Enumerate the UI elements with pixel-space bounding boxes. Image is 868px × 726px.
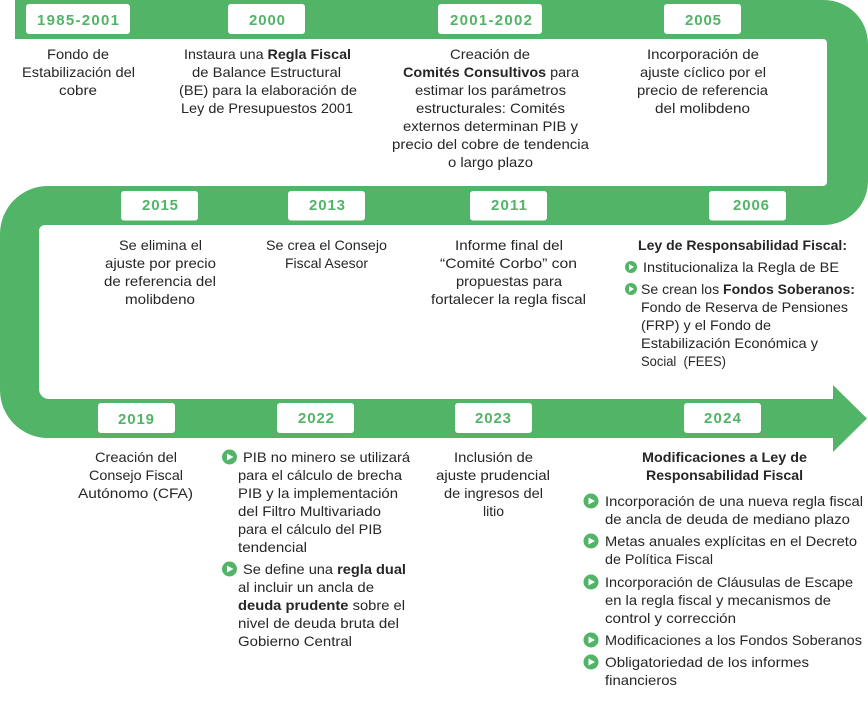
event 2022: PIB y la implementación: [238, 485, 398, 501]
event 2022: para el cálculo del PIB: [238, 521, 382, 537]
event 1985-2001: Estabilización del: [22, 64, 135, 80]
event 2006: Social (FEES): [641, 353, 726, 369]
event 2006: Institucionaliza la Regla de BE: [643, 259, 839, 275]
event 2015: 2015: [142, 197, 178, 214]
event 2024: Modificaciones a los Fondos Soberanos: [605, 632, 862, 648]
event 2023: litio: [483, 503, 504, 519]
event 2022: [222, 403, 410, 649]
event 2001-2002: Creación de: [450, 46, 530, 62]
event 2015: Se elimina el: [119, 237, 202, 253]
event 2005: del molibdeno: [655, 100, 750, 116]
event 2001-2002: estimar los parámetros: [415, 82, 566, 98]
event 2006: (FRP) y el Fondo de: [641, 317, 771, 333]
event 2013: Se crea el Consejo: [266, 237, 387, 253]
event 2001-2002: externos determinan PIB y: [403, 118, 578, 134]
event 2023: [436, 403, 550, 519]
event 2015: [104, 191, 216, 307]
event 2022: Gobierno Central: [238, 633, 352, 649]
event 2005: precio de referencia: [637, 82, 768, 98]
event 1985-2001: Fondo de: [47, 46, 109, 62]
event 2001-2002: 2001-2002: [450, 12, 532, 29]
event 2001-2002: estructurales: Comités: [416, 100, 565, 116]
event 2024: Incorporación de una nueva regla fiscal: [605, 493, 863, 509]
event 2023: Inclusión de: [454, 449, 533, 465]
event 2024: financieros: [605, 672, 677, 688]
event 2001-2002: o largo plazo: [448, 154, 533, 170]
event 2024: 2024: [704, 410, 742, 427]
event 2024: Responsabilidad Fiscal: [646, 467, 803, 483]
event 2019: [78, 403, 193, 501]
event 2024: de Política Fiscal: [605, 551, 713, 567]
event 2024: de ancla de deuda de mediano plazo: [605, 511, 850, 527]
event 2024: Modificaciones a Ley de: [642, 449, 807, 465]
event 2022: para el cálculo de brecha: [238, 467, 402, 483]
event 2024: [584, 403, 863, 688]
event 2000: [179, 4, 357, 116]
event 1985-2001: 1985-2001: [37, 12, 119, 29]
event 2019: Creación del: [95, 449, 177, 465]
event 2001-2002: precio del cobre de tendencia: [392, 136, 589, 152]
event 1985-2001: [22, 4, 135, 98]
event 2022: Se define una regla dual: [243, 561, 406, 577]
event 2000: de Balance Estructural: [192, 64, 341, 80]
event 2011: [431, 191, 586, 307]
event 2022: tendencial: [238, 539, 307, 555]
event 2000: Instaura una Regla Fiscal: [184, 46, 351, 62]
event 1985-2001: cobre: [59, 82, 97, 98]
event 2023: 2023: [475, 410, 511, 427]
event 2006: Se crean los Fondos Soberanos:: [641, 281, 855, 297]
event 2013: 2013: [309, 197, 345, 214]
event 2006: Fondo de Reserva de Pensiones: [641, 299, 848, 315]
event 2024: en la regla fiscal y mecanismos de: [605, 592, 831, 608]
event 2013: [266, 191, 387, 271]
event 2006: 2006: [733, 197, 769, 214]
event 2011: propuestas para: [456, 273, 562, 289]
event 2022: nivel de deuda bruta del: [238, 615, 399, 631]
event 2024: Obligatoriedad de los informes: [605, 654, 809, 670]
event 2023: ajuste prudencial: [436, 467, 550, 483]
event 2011: 2011: [491, 197, 527, 214]
event 2019: Autónomo (CFA): [78, 485, 193, 501]
event 2005: [637, 4, 768, 116]
event 2022: PIB no minero se utilizará: [243, 449, 410, 465]
event 2022: deuda prudente sobre el: [238, 597, 405, 613]
event 2015: ajuste por precio: [105, 255, 216, 271]
event 2005: Incorporación de: [647, 46, 759, 62]
event 2024: Incorporación de Cláusulas de Escape: [605, 574, 853, 590]
event 2022: del Filtro Multivariado: [238, 503, 381, 519]
event 2000: Ley de Presupuestos 2001: [181, 100, 353, 116]
event 2005: ajuste cíclico por el: [640, 64, 766, 80]
event 2022: al incluir un ancla de: [238, 579, 374, 595]
event 2019: Consejo Fiscal: [89, 467, 183, 483]
event 2001-2002: [392, 4, 589, 170]
event 2024: Metas anuales explícitas en el Decreto: [605, 533, 857, 549]
event 2011: Informe final del: [455, 237, 563, 253]
event 2005: 2005: [685, 12, 721, 29]
event 2006: Ley de Responsabilidad Fiscal:: [638, 237, 847, 253]
event 2000: (BE) para la elaboración de: [179, 82, 357, 98]
event 2015: molibdeno: [125, 291, 195, 307]
event 2011: fortalecer la regla fiscal: [431, 291, 586, 307]
event 2022: 2022: [298, 410, 334, 427]
event 2019: 2019: [118, 411, 154, 428]
event 2013: Fiscal Asesor: [285, 255, 368, 271]
event 2001-2002: Comités Consultivos para: [403, 64, 579, 80]
event 2006: Estabilización Económica y: [641, 335, 818, 351]
event 2023: de ingresos del: [444, 485, 543, 501]
event 2011: “Comité Corbo” con: [440, 255, 577, 271]
event 2006: [625, 191, 855, 369]
event 2015: de referencia del: [104, 273, 216, 289]
timeline arrow band: [0, 0, 868, 452]
event 2024: control y corrección: [605, 610, 736, 626]
event 2000: 2000: [249, 12, 285, 29]
